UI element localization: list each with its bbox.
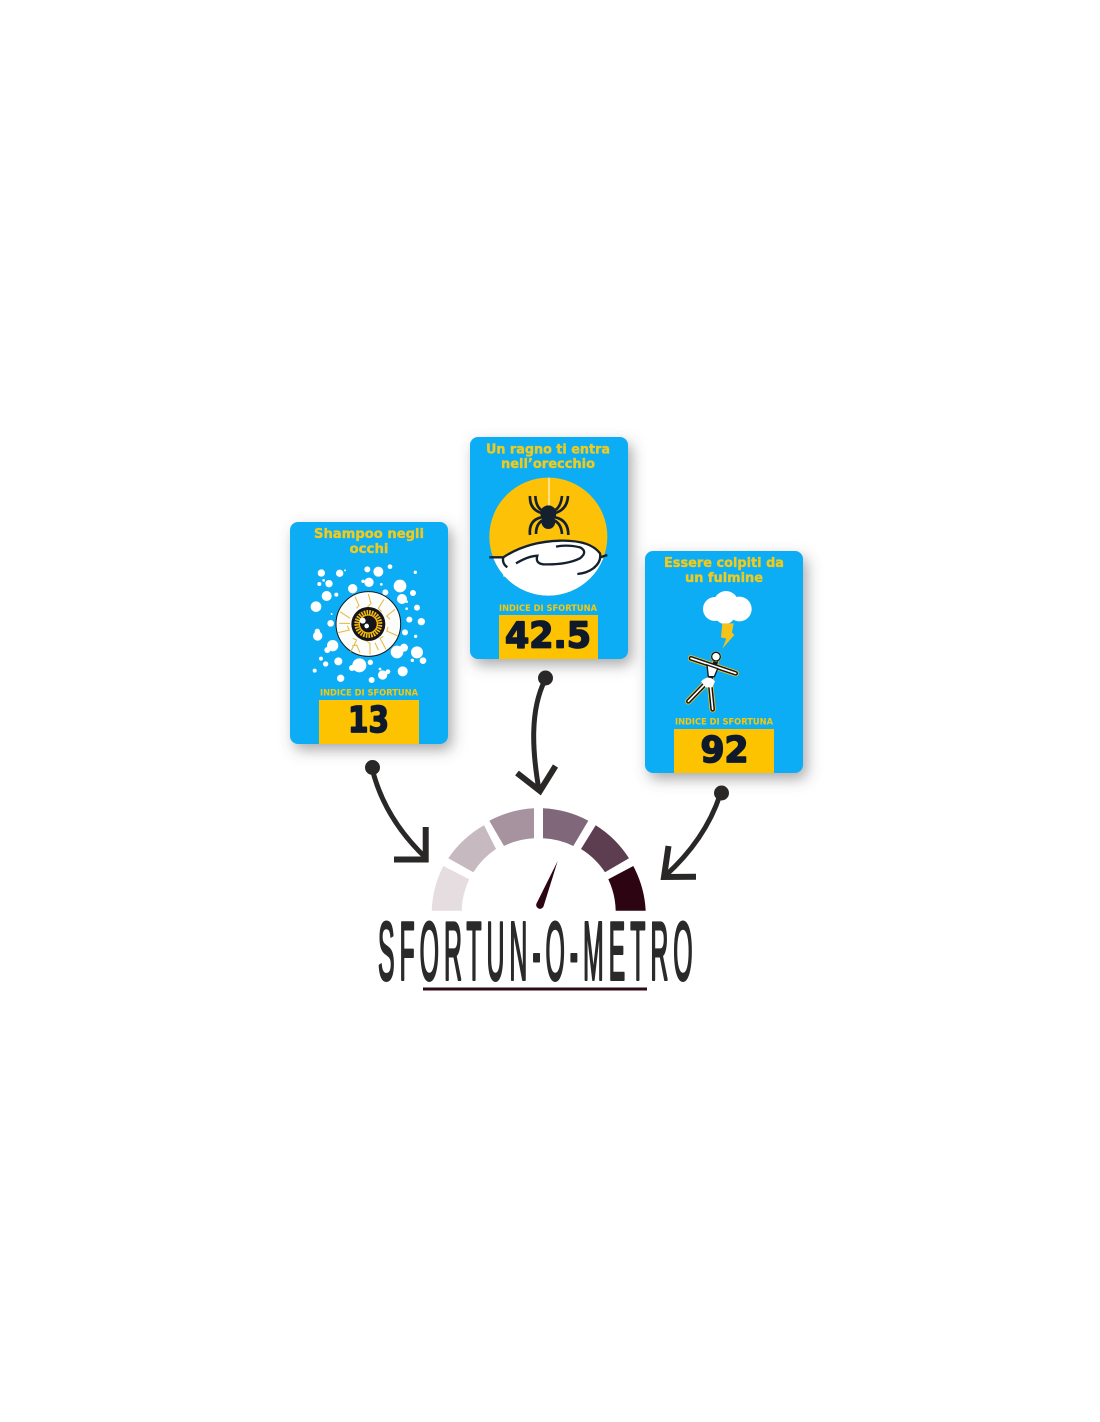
icon: spider above an ear xyxy=(489,478,607,598)
score box: 13: 13 xyxy=(348,700,389,741)
card title: Shampoo negli occhi xyxy=(314,526,424,557)
title underline xyxy=(423,988,647,990)
card: Shampoo negli occhi xyxy=(290,522,448,744)
score box: 92: 92 xyxy=(700,730,748,771)
gauge: sfortun-o-metro dial xyxy=(432,808,646,911)
arrow: left card to gauge xyxy=(365,760,426,860)
card: Un ragno ti entra nell'orecchio xyxy=(470,437,628,659)
card title: Essere colpiti da un fulmine xyxy=(664,555,784,586)
icon: cloud, lightning and skeleton xyxy=(688,591,752,709)
card title: Un ragno ti entra nell'orecchio: Un ragno ti entra xyxy=(486,442,610,458)
gauge needle xyxy=(536,861,558,909)
label: indice di sfortuna: INDICE DI SFORTUNA xyxy=(675,718,773,728)
gauge segment 4 xyxy=(543,808,588,846)
gauge segment 6 xyxy=(608,866,646,911)
label: indice di sfortuna: INDICE DI SFORTUNA xyxy=(320,689,418,699)
gauge segment 2 xyxy=(448,825,496,872)
arrow: right card to gauge xyxy=(664,786,729,877)
card title: Essere colpiti da un fulmine: Essere colpiti da xyxy=(664,555,784,571)
card title: Shampoo negli occhi: occhi xyxy=(350,541,388,557)
icon: eye with shampoo bubbles xyxy=(311,564,426,683)
title: SFORTUN-O-METRO: SFORTUN-O-METRO xyxy=(378,905,698,997)
label: indice di sfortuna: INDICE DI SFORTUNA xyxy=(499,604,597,614)
card title: Shampoo negli occhi: Shampoo negli xyxy=(314,526,424,542)
gauge segment 3 xyxy=(489,808,534,846)
card title: Essere colpiti da un fulmine: un fulmine xyxy=(685,570,763,586)
score box: 92 xyxy=(674,729,774,773)
card: Essere colpiti da un fulmine xyxy=(645,551,803,773)
score box: 13 xyxy=(319,700,419,744)
gauge segment 1 xyxy=(432,866,469,911)
gauge segment 5 xyxy=(581,825,629,872)
arrow: middle card to gauge xyxy=(517,670,556,791)
card title: Un ragno ti entra nell'orecchio xyxy=(486,442,610,472)
card title: Un ragno ti entra nell'orecchio: nell’orecchio xyxy=(501,456,595,472)
score box: 42.5: 42.5 xyxy=(505,616,591,656)
